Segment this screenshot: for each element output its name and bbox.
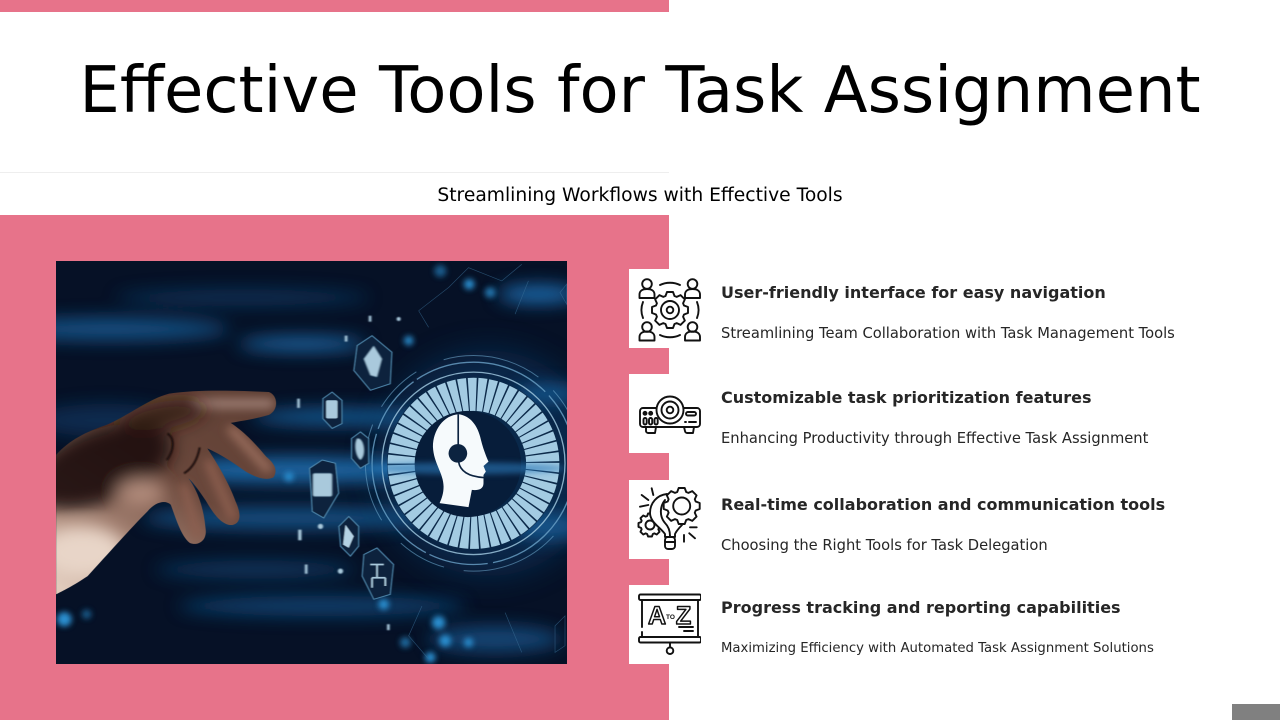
feature 4 bbox=[629, 585, 1154, 664]
icon: A to Z presentation board: TO bbox=[666, 614, 675, 621]
glow behind the disk bbox=[375, 351, 602, 576]
icon: lightbulb with gears bbox=[629, 480, 701, 559]
light streaks bbox=[0, 285, 585, 652]
icon: projector bbox=[629, 374, 701, 453]
icon: team around a gear bbox=[629, 269, 701, 348]
heading: Real-time collaboration and communication tools bbox=[721, 494, 1165, 514]
small hexagon icons bbox=[297, 316, 401, 630]
top accent bar bbox=[0, 0, 669, 12]
feature 3 bbox=[296, 264, 1165, 654]
title: Effective Tools for Task Assignment bbox=[79, 54, 1201, 128]
bokeh dots bbox=[57, 265, 495, 663]
network lines bbox=[409, 264, 567, 659]
heading: Progress tracking and reporting capabilities bbox=[721, 598, 1121, 616]
description: Enhancing Productivity through Effective Task Assignment bbox=[721, 430, 1148, 447]
description: Maximizing Efficiency with Automated Task Assignment Solutions bbox=[721, 640, 1154, 656]
hand bbox=[56, 390, 276, 594]
feature 1 bbox=[629, 269, 1175, 348]
subtitle: Streamlining Workflows with Effective Tools bbox=[437, 185, 843, 206]
icon: A to Z presentation board: Z bbox=[676, 602, 691, 630]
icon: A to Z presentation board: A bbox=[648, 602, 666, 630]
header divider bbox=[0, 172, 669, 173]
corner page tab bbox=[1232, 704, 1280, 720]
description: Streamlining Team Collaboration with Task Management Tools bbox=[721, 325, 1175, 342]
heading: Customizable task prioritization features bbox=[721, 388, 1092, 406]
description: Choosing the Right Tools for Task Delegation bbox=[721, 537, 1048, 554]
photo: hand reaching toward a holographic support icon bbox=[56, 261, 696, 664]
headset head silhouette bbox=[433, 414, 488, 507]
heading: User-friendly interface for easy navigation bbox=[721, 282, 1106, 302]
feature 2 bbox=[629, 374, 1148, 453]
icon: A to Z presentation board bbox=[629, 585, 701, 664]
holographic rings bbox=[365, 356, 582, 571]
pink panel bbox=[0, 215, 669, 720]
